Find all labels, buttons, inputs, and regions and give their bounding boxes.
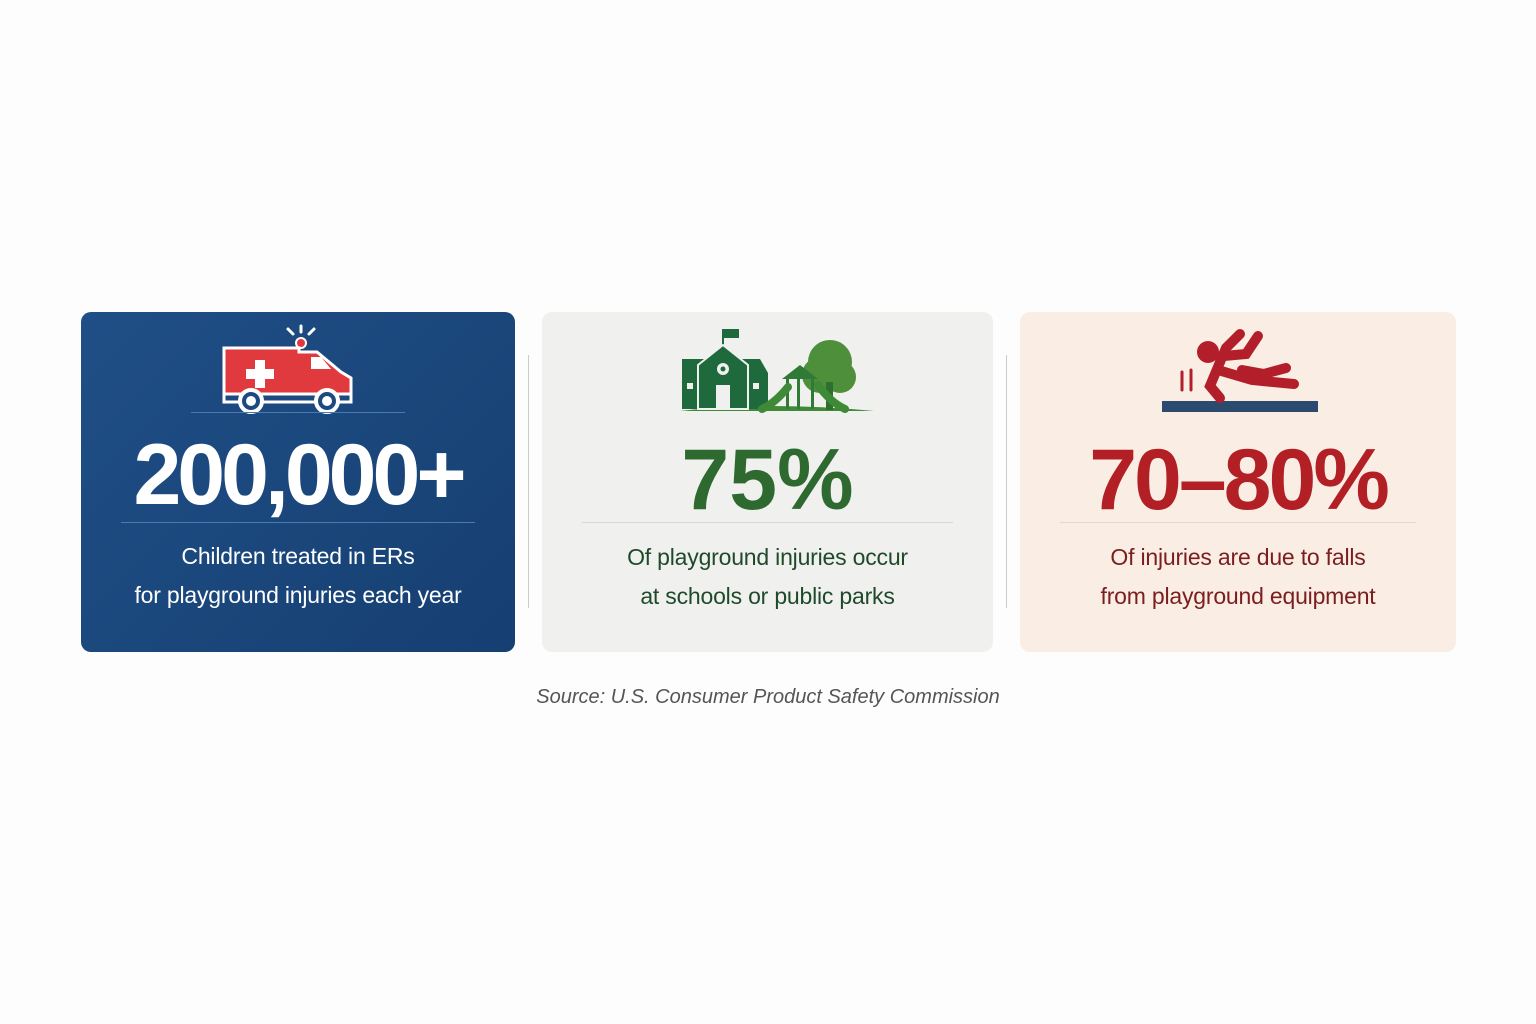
icon: school and playground <box>680 329 874 413</box>
description <box>134 543 462 608</box>
description: at schools or public parks <box>640 583 895 609</box>
description: from playground equipment <box>1100 583 1376 609</box>
icon: falling person <box>1162 329 1318 412</box>
divider <box>1006 355 1007 608</box>
description: for playground injuries each year <box>134 582 462 608</box>
divider <box>528 355 529 608</box>
source note: Source: U.S. Consumer Product Safety Commission <box>536 686 1000 708</box>
panel: ER visits <box>81 312 515 652</box>
big number: 75% <box>681 432 854 528</box>
description: Of playground injuries occur <box>627 544 908 570</box>
icon: ambulance <box>222 324 352 414</box>
description <box>627 544 908 609</box>
description <box>1100 544 1376 609</box>
panel: falls <box>1020 312 1456 652</box>
panel: location <box>542 312 993 652</box>
big number: 200,000+ <box>133 427 463 523</box>
description: Of injuries are due to falls <box>1110 544 1366 570</box>
big number: 70–80% <box>1089 432 1387 528</box>
description: Children treated in ERs <box>181 543 415 569</box>
